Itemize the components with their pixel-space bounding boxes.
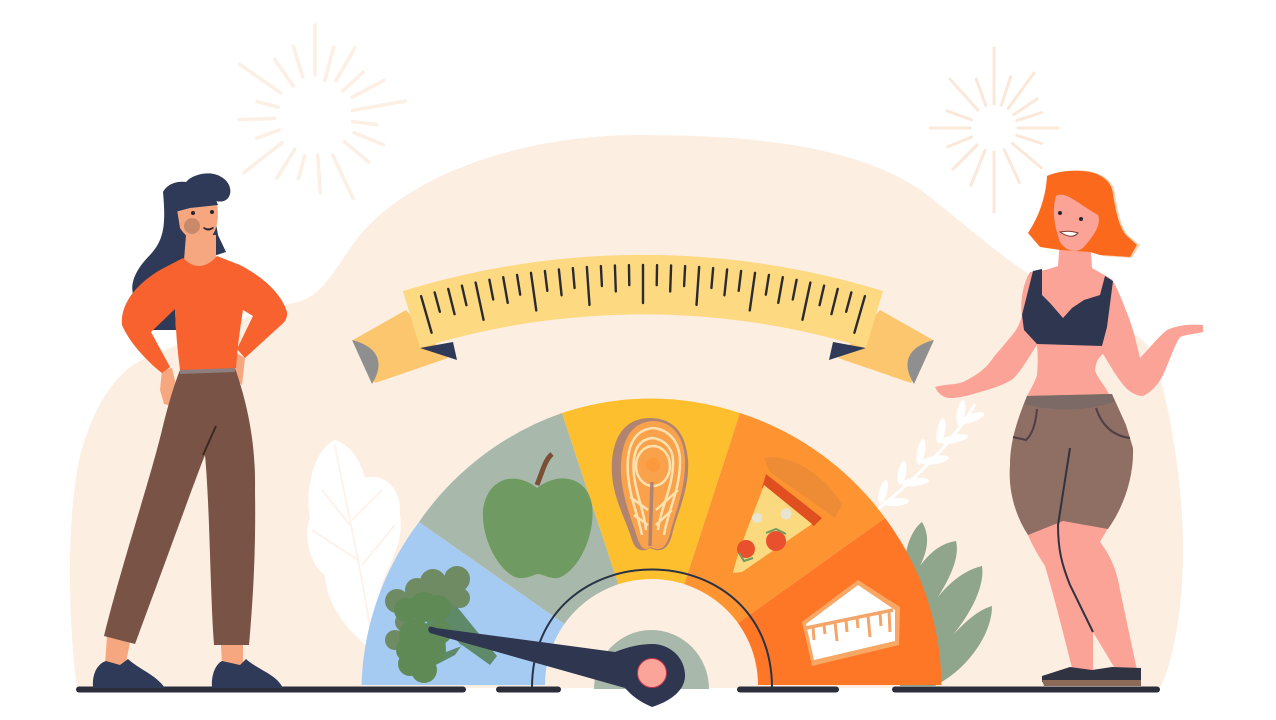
shorts inner line [1058,448,1070,525]
ribbon tail left [352,310,457,384]
gauge segment: deep orange [652,518,942,685]
ground line [79,686,1157,692]
icon: salmon steak [612,418,688,550]
background blob [70,135,1183,688]
neck [1027,240,1113,280]
left hand [160,368,176,406]
icon: pizza slice [733,457,842,573]
figure: woman left [93,173,287,688]
icon: white sprig [872,400,986,514]
bra [1022,269,1113,346]
pockets [1013,408,1130,440]
waistband [1024,394,1114,410]
hair back [132,173,230,297]
gauge segment: yellow [562,398,740,685]
ribbon band [403,255,883,348]
face [176,200,218,242]
gauge needle [428,627,685,707]
icon: white leaf behind gauge [307,440,401,650]
ruler ticks [421,265,865,333]
sunburst left [239,25,406,199]
ankles [105,636,243,668]
dark gap behind arm [150,308,176,330]
icon: cake slice [802,580,900,666]
shoes [1042,667,1141,686]
shoe right [212,659,283,688]
figure: woman right [935,170,1203,686]
tape measure ribbon [352,255,934,384]
waist band [180,367,235,374]
icon: apple [483,454,593,578]
face [1054,195,1099,251]
shorts [1010,394,1133,535]
sunburst right [930,48,1058,212]
gauge inner circle [545,579,758,685]
right hand [235,352,245,385]
icon: broccoli [385,566,497,683]
icon: green leaves [900,522,992,686]
shoe left [93,659,165,688]
gauge dial [362,398,942,689]
ribbon tail right [829,310,934,384]
eyes and mouth [191,210,214,230]
needle pink pivot [638,658,666,688]
hair fringe [170,190,218,212]
gauge segment: sage [419,413,652,685]
hair [1028,171,1137,257]
orange top [122,256,287,373]
hair outline [1049,170,1140,258]
facial features [1058,211,1083,236]
legs [1028,510,1137,672]
leg line [1058,448,1093,632]
gauge small sage arc [594,630,709,689]
gauge segment: blue [362,522,652,685]
neck [184,235,216,268]
gauge thin arc [532,570,772,688]
trouser crease [203,426,216,455]
cheek [184,218,200,234]
torso and arms [935,268,1203,398]
trousers [104,368,255,645]
gauge segment: orange [652,413,885,685]
